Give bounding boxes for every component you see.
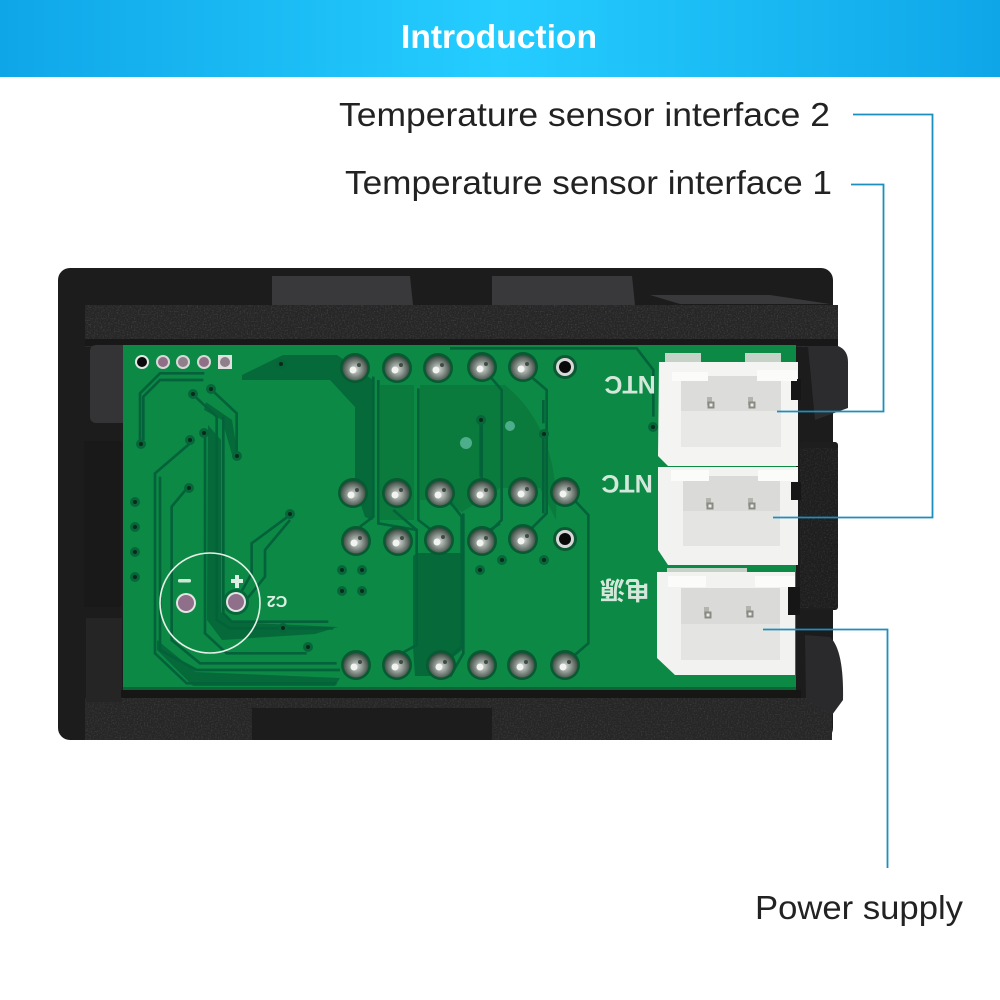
- label: temperature sensor interface 2: Temperature sensor interface 2: [339, 96, 830, 133]
- connector 1: [658, 353, 801, 466]
- thin traces: [140, 373, 500, 683]
- header pin holes: [135, 355, 232, 369]
- capacitor marking C2: [160, 553, 287, 653]
- upper rim: [85, 305, 838, 347]
- dark copper regions: [157, 355, 462, 686]
- label: temperature sensor interface 1: Temperature sensor interface 1: [345, 164, 832, 201]
- device housing: [58, 268, 848, 740]
- silkscreen NTC labels: NTC: [601, 469, 653, 497]
- silkscreen NTC labels: NTC: [604, 370, 656, 398]
- copper planes: [380, 385, 556, 520]
- label: power supply: Power supply: [755, 889, 964, 926]
- vias: [130, 359, 658, 652]
- right clips: [800, 346, 848, 715]
- solder joints: [338, 352, 580, 680]
- silkscreen NTC labels: [600, 370, 656, 603]
- housing top tabs: [272, 276, 830, 305]
- connector 2: [658, 467, 801, 565]
- circuit board: [121, 345, 801, 698]
- connector 3: [657, 568, 800, 675]
- capacitor marking C2: C2: [267, 592, 287, 609]
- header banner: [0, 0, 1000, 77]
- left clips: [84, 345, 128, 702]
- leader line: interface 2: [773, 114, 932, 518]
- leader line: interface 1: [777, 184, 884, 412]
- leader line: power supply: [763, 630, 888, 868]
- silkscreen NTC labels: 电源: [600, 575, 650, 603]
- mounting holes: [553, 355, 577, 551]
- lower rim: [85, 698, 832, 740]
- title: Introduction: [401, 18, 597, 55]
